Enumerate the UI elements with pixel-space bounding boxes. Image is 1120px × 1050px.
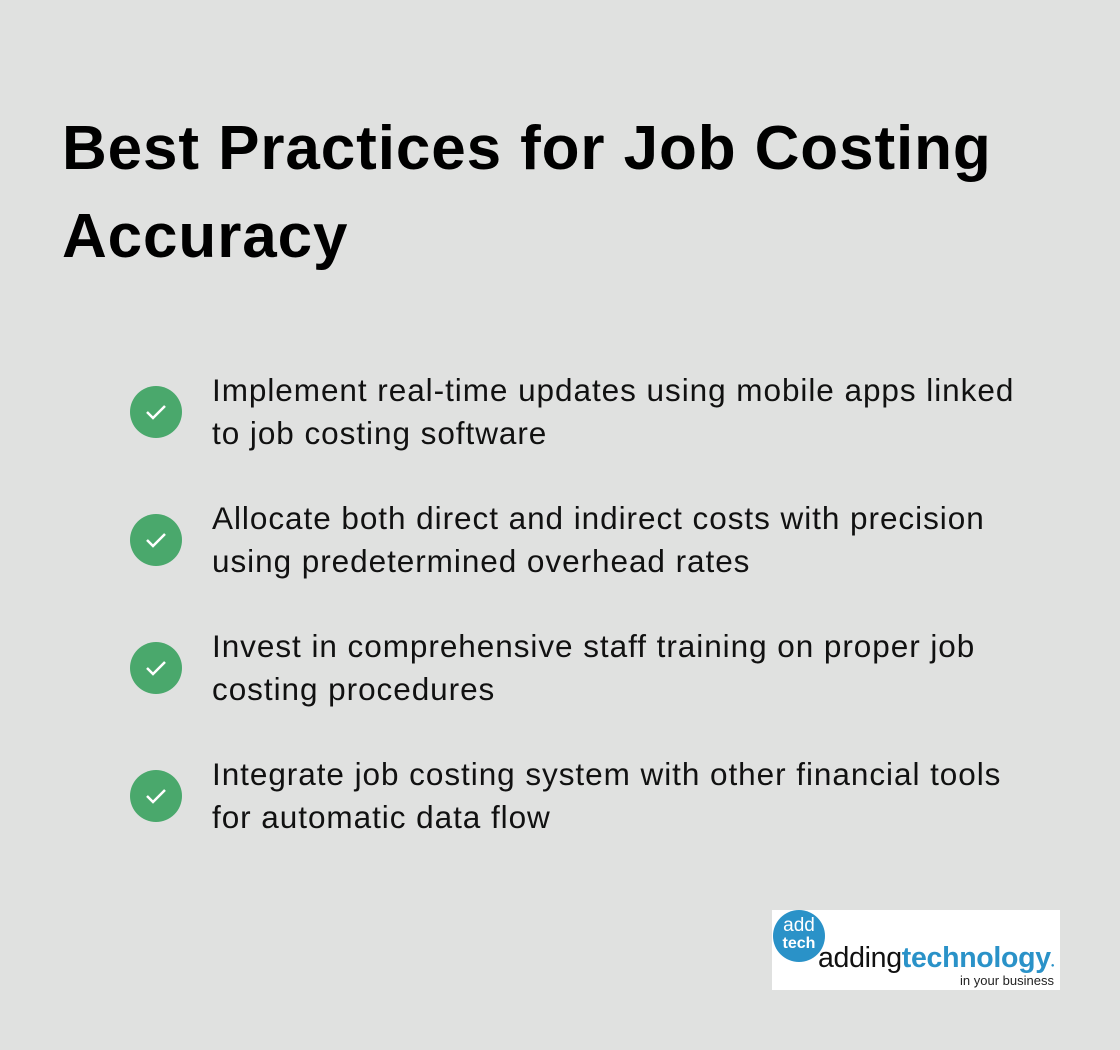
text 3: costing procedures (212, 671, 495, 707)
text 1 (212, 372, 1014, 451)
text 3: Invest in comprehensive staff training on proper job (212, 628, 975, 664)
text 4: for automatic data flow (212, 799, 551, 835)
item 1 (130, 372, 1014, 451)
title: Best Practices for Job Costing (62, 114, 992, 183)
item 2 (130, 500, 985, 579)
title (62, 114, 992, 271)
text 1: Implement real-time updates using mobile apps linked (212, 372, 1014, 408)
item 4 (130, 756, 1001, 835)
text 2: using predetermined overhead rates (212, 543, 750, 579)
text 4: Integrate job costing system with other financial tools (212, 756, 1001, 792)
icon: check (130, 386, 182, 438)
logo circle (773, 910, 825, 962)
logo tagline: in your business (960, 973, 1054, 988)
text 1: to job costing software (212, 415, 547, 451)
text 2 (212, 500, 985, 579)
text 4 (212, 756, 1001, 835)
logo (772, 910, 1060, 990)
icon: check (130, 642, 182, 694)
icon: check (130, 514, 182, 566)
title: Accuracy (62, 202, 348, 271)
logo circle: tech (783, 935, 815, 952)
text 2: Allocate both direct and indirect costs with precision (212, 500, 985, 536)
text 3 (212, 628, 975, 707)
logo circle: add (783, 915, 815, 936)
logo wordmark: addingtechnology● (818, 942, 1054, 974)
item 3 (130, 628, 975, 707)
icon: check (130, 770, 182, 822)
